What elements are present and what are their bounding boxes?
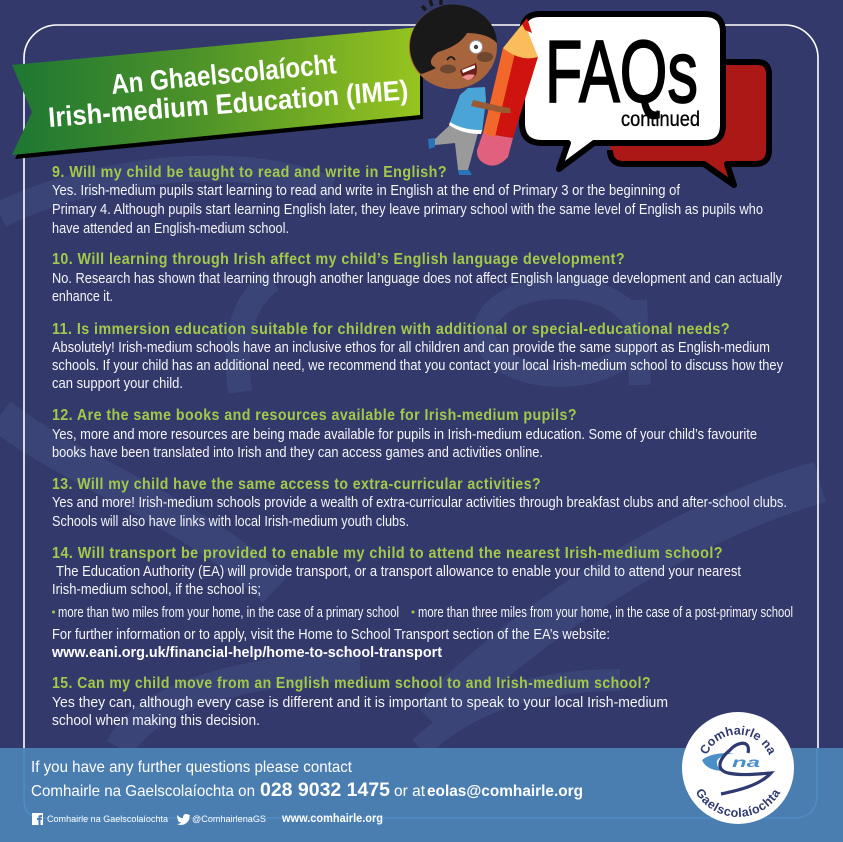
logo text bottom: Gaelscolaíochta <box>696 789 780 817</box>
child hair <box>410 5 497 74</box>
pencil orange side <box>483 48 515 137</box>
banner title line 1: An Ghaelscolaíocht <box>110 48 338 100</box>
FAQ 12: Yes, more and more resources are being made available for pupils in Irish-medium education. Some of your child’s favourite <box>52 427 757 443</box>
banner title line 2: Irish-medium Education (IME) <box>47 74 409 133</box>
FAQ 14: more than two miles from your home, in the case of a primary school <box>58 605 399 621</box>
FAQ 11: 11. Is immersion education suitable for children with additional or special-educational needs? <box>52 321 730 338</box>
footer social links <box>32 811 383 825</box>
continued label: continued <box>621 108 700 131</box>
footer social links: www.comhairle.org <box>281 811 383 825</box>
FAQ 14: For further information or to apply, visit the Home to School Transport section of the EA’s website: <box>52 627 610 643</box>
FAQ 14: Irish-medium school, if the school is; <box>52 582 261 598</box>
FAQs heading: FAQs <box>545 22 698 121</box>
FAQ 15: school when making this decision. <box>52 713 260 729</box>
FAQ 10: enhance it. <box>52 289 113 305</box>
title banner <box>12 27 423 159</box>
FAQ 10: 10. Will learning through Irish affect my child’s English language development? <box>52 251 625 268</box>
bullet 2 <box>412 610 414 614</box>
FAQ 12: books have been translated into Irish and they can access games and activities online. <box>52 445 543 461</box>
FAQ 14: The Education Authority (EA) will provide transport, or a transport allowance to enable your child to attend your nearest <box>56 564 741 580</box>
footer contact text <box>31 759 583 801</box>
child head <box>409 5 497 89</box>
footer social links: @ComhairlenaGS <box>192 814 266 824</box>
watermark swirl <box>0 168 820 748</box>
FAQ 11: can support your child. <box>52 376 183 392</box>
FAQ 9: Yes. Irish-medium pupils start learning to read and write in English at the end of Primary 3 or the beginning of <box>52 183 681 199</box>
icon: twitter <box>177 814 190 825</box>
FAQ 13: Schools will also have links with local Irish-medium youth clubs. <box>52 514 409 530</box>
FAQ 14: www.eani.org.uk/financial-help/home-to-school-transport <box>51 644 442 661</box>
logo: Comhairle na Gaelscolaíochta <box>682 712 794 824</box>
FAQ 13: 13. Will my child have the same access to extra-curricular activities? <box>52 476 541 493</box>
child shoes <box>428 138 472 175</box>
FAQ 11 <box>52 321 784 392</box>
logo na letters: na <box>732 754 760 770</box>
child arm <box>471 100 511 113</box>
icon: child with pencil <box>409 0 538 175</box>
footer contact text: or at <box>394 783 426 800</box>
footer social links: Comhairle na Gaelscolaíochta <box>47 814 168 824</box>
speech bubble: red <box>610 62 769 185</box>
pencil eraser <box>477 133 513 166</box>
footer contact text: 028 9032 1475 <box>260 780 390 801</box>
FAQ 15 <box>52 675 668 729</box>
pencil body <box>483 48 538 138</box>
logo emblem: dark swirl <box>720 743 771 794</box>
FAQ 14: 14. Will transport be provided to enable my child to attend the nearest Irish-medium school? <box>52 545 723 562</box>
FAQ 12 <box>52 407 757 461</box>
child closed eye <box>447 57 455 60</box>
footer contact text: Comhairle na Gaelscolaíochta on <box>31 783 255 800</box>
FAQ 15: 15. Can my child move from an English medium school to and Irish-medium school? <box>52 675 651 692</box>
footer contact text: eolas@comhairle.org <box>427 783 583 800</box>
child mouth <box>460 63 477 80</box>
speech bubble: white <box>522 14 723 169</box>
FAQ 9: 9. Will my child be taught to read and write in English? <box>52 164 447 181</box>
FAQ 12: 12. Are the same books and resources available for Irish-medium pupils? <box>52 407 577 424</box>
FAQ 11: Absolutely! Irish-medium schools have an inclusive ethos for all children and can provide the same support as English-medium <box>52 340 770 356</box>
FAQ 10 <box>52 251 783 305</box>
FAQ 9 <box>52 164 763 237</box>
child shirt <box>450 87 486 132</box>
child legs <box>435 124 478 170</box>
contact footer band <box>0 748 843 842</box>
FAQ 9: Primary 4. Although pupils start learning English later, they leave primary school with the same level of English as pupils who <box>52 202 763 218</box>
child cheeks <box>440 64 456 74</box>
footer contact text: If you have any further questions please contact <box>31 759 353 776</box>
FAQ 14 <box>51 545 793 661</box>
logo text top: Comhairle na <box>700 726 774 756</box>
FAQ 9: have attended an English-medium school. <box>52 221 289 237</box>
pencil wood tip <box>503 22 538 58</box>
bullet 1 <box>52 610 55 614</box>
icon: facebook <box>32 813 43 825</box>
FAQ 13 <box>52 476 787 530</box>
FAQ 15: Yes they can, although every case is different and it is important to speak to your local Irish-medium <box>52 695 668 711</box>
frame continuation in footer <box>24 748 817 818</box>
logo emblem: blue crescent <box>702 753 734 771</box>
child eye <box>470 40 482 54</box>
